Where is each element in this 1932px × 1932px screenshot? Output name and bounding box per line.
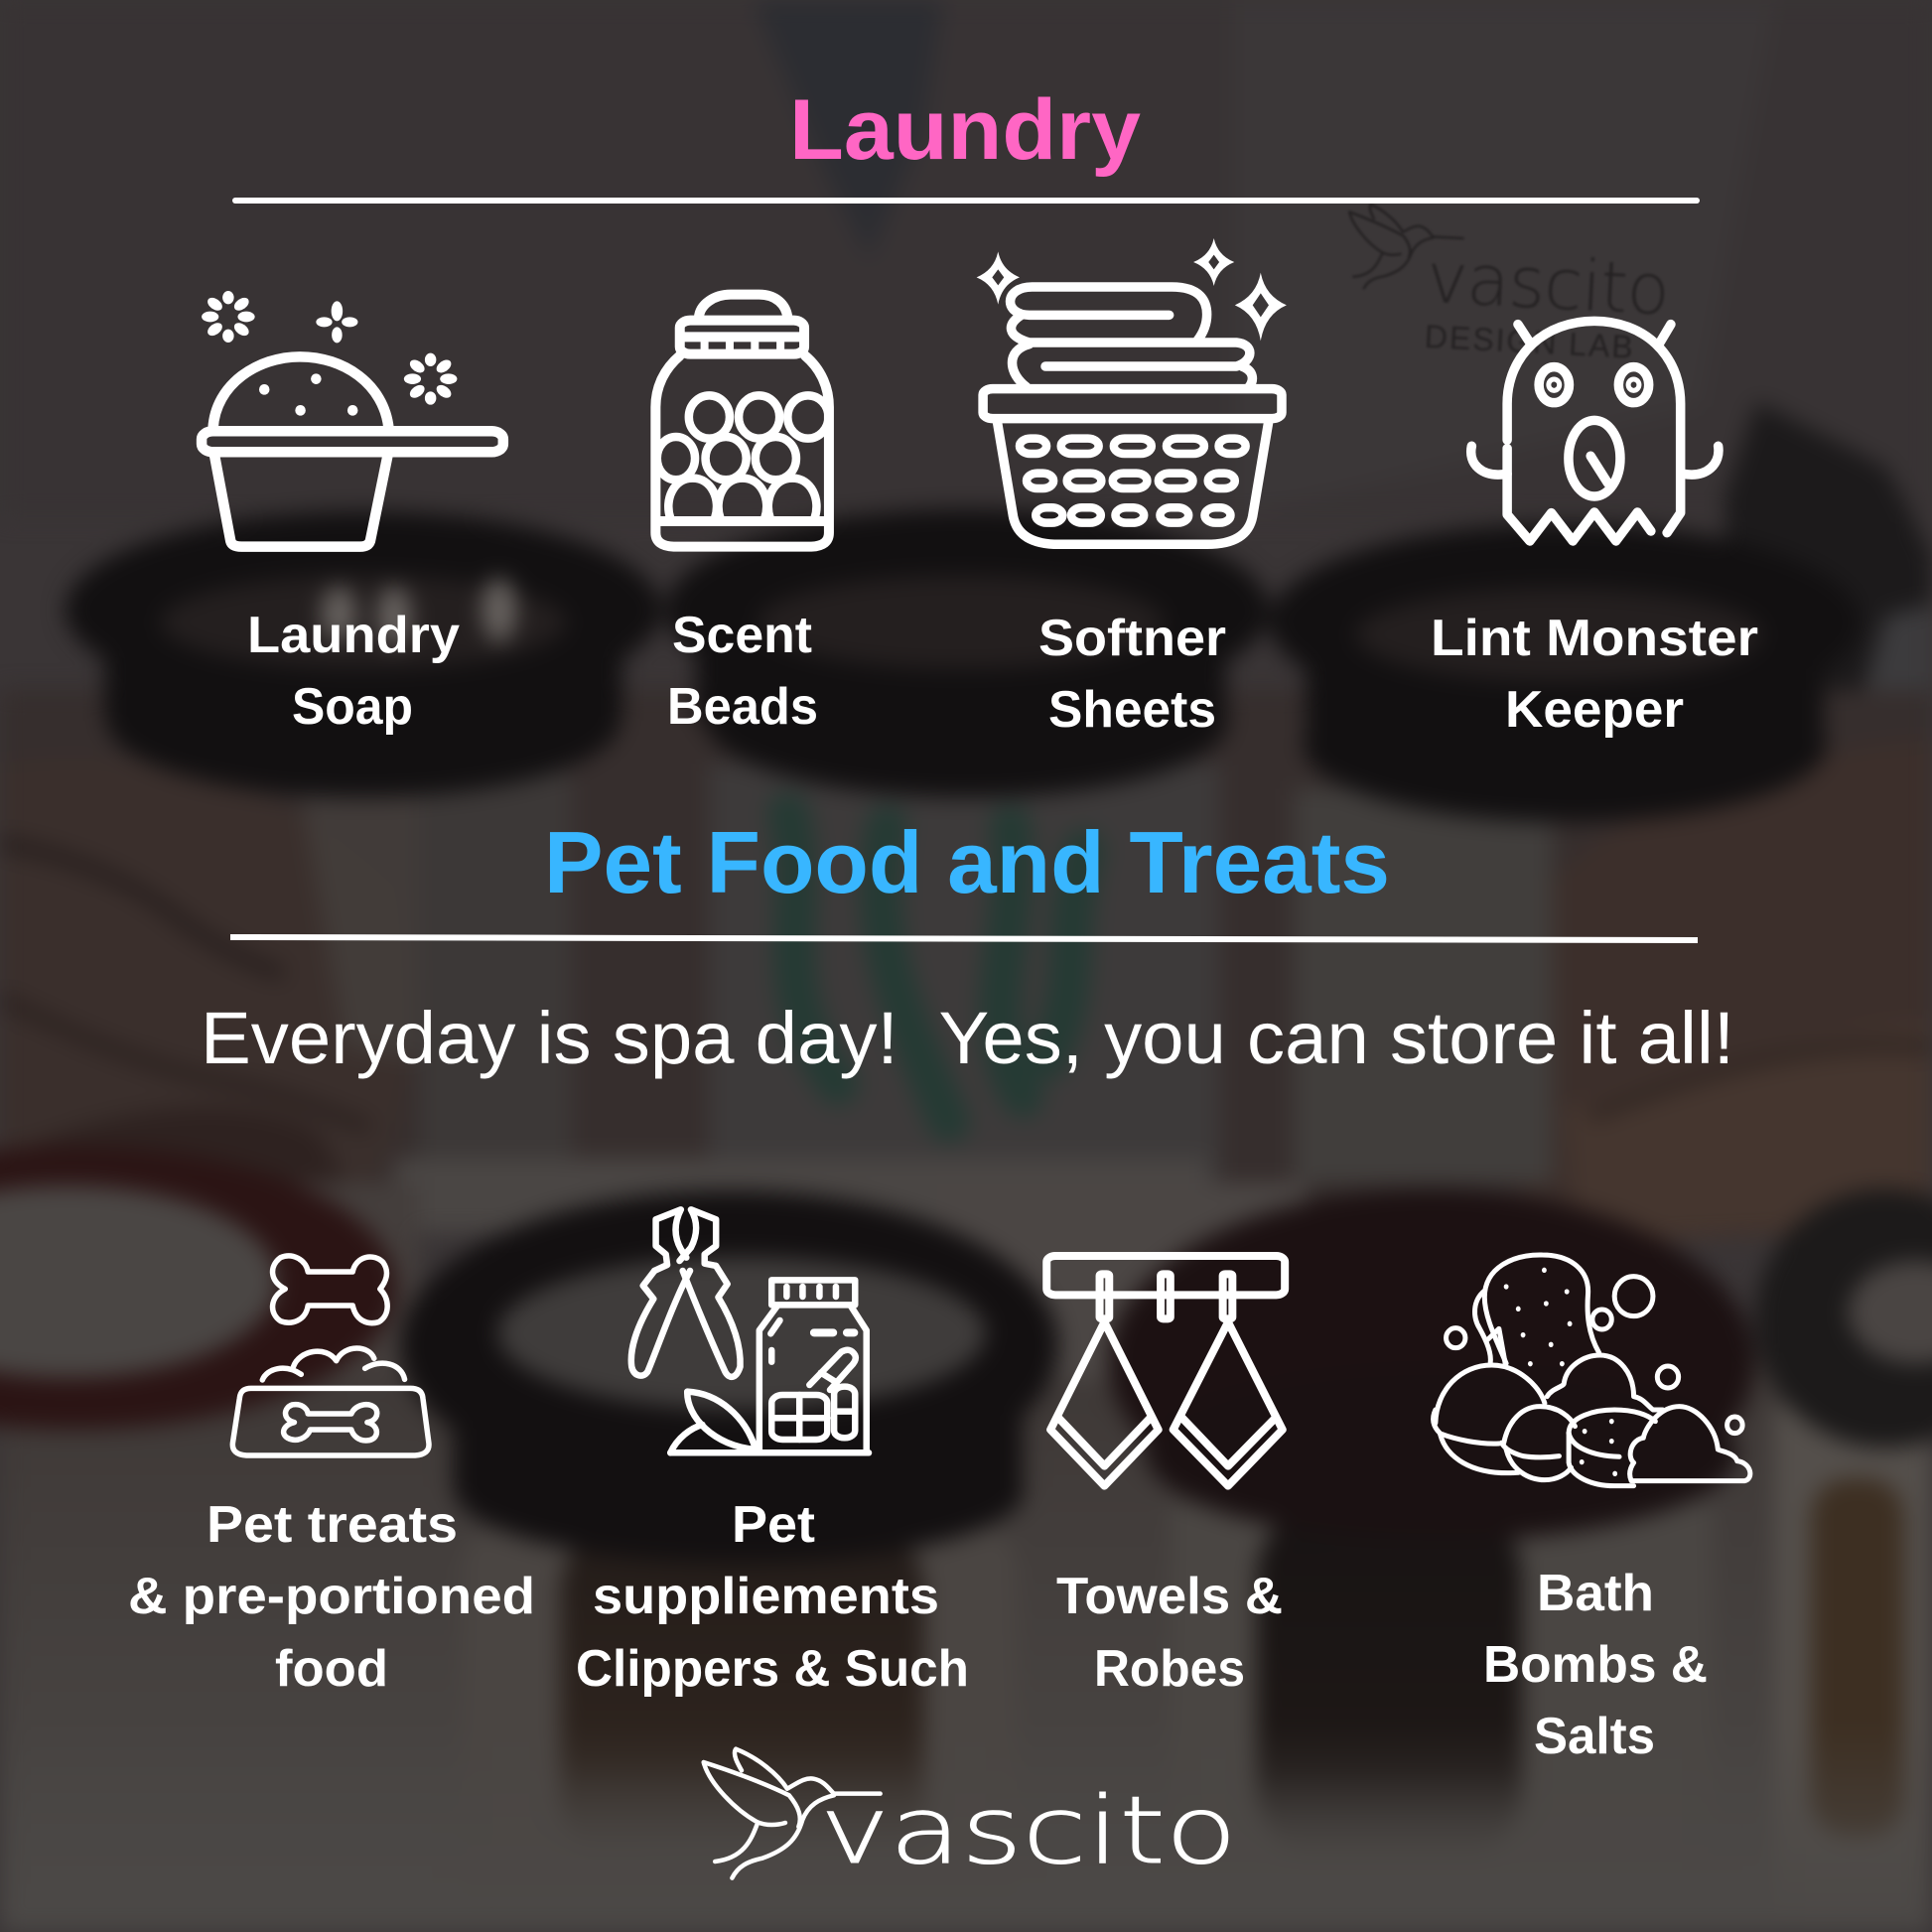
label: Softner Sheets: Sheets: [1048, 681, 1216, 739]
icon: scent beads jar: [655, 295, 829, 547]
tagline: Everyday is spa day! Yes, you can store it all!: [201, 997, 1734, 1079]
label: Towels and Robes: Robes: [1094, 1640, 1245, 1698]
rule under Laundry heading: [232, 198, 1700, 204]
label: Scent Beads: Scent: [672, 607, 812, 664]
icon: bath bombs and salts: [1434, 1255, 1750, 1486]
label: Pet supplements, clippers and such: Clippers & Such: [576, 1640, 969, 1698]
label: Scent Beads: Beads: [667, 678, 818, 736]
label: Bath Bombs and Salts: [1483, 1565, 1708, 1765]
heading: Pet Food and Treats: Pet Food and Treats: [544, 813, 1390, 911]
label: Pet supplements, clippers and such: [576, 1496, 969, 1698]
icon: lint monster: [1471, 321, 1719, 541]
label: Pet supplements, clippers and such: suppliements: [593, 1568, 939, 1625]
label: Pet treats and pre-portioned food: Pet treats: [207, 1496, 458, 1554]
label: Laundry Soap: Laundry: [247, 607, 460, 664]
label: Softner Sheets: Softner: [1038, 610, 1226, 667]
label: Scent Beads: [667, 607, 818, 736]
label: Bath Bombs and Salts: Salts: [1534, 1708, 1655, 1765]
label: Towels and Robes: Towels &: [1056, 1568, 1283, 1625]
label: Lint Monster Keeper: Keeper: [1505, 681, 1684, 739]
label: Softner Sheets: [1038, 610, 1226, 739]
label: Pet supplements, clippers and such: Pet: [732, 1496, 815, 1554]
icon: softener sheets basket: [977, 238, 1287, 544]
label: Pet treats and pre-portioned food: food: [275, 1640, 388, 1698]
icon: pet treats bone and bowl: [232, 1256, 429, 1455]
label: Lint Monster Keeper: Lint Monster: [1431, 610, 1758, 667]
logo: vascito hummingbird: vascito: [820, 1777, 1237, 1885]
icon: pet supplements and clippers: [631, 1209, 869, 1452]
heading: Laundry: Laundry: [789, 82, 1141, 178]
icon: laundry soap scoop: [202, 291, 503, 547]
label: Lint Monster Keeper: [1431, 610, 1758, 739]
shirt logo: [1342, 204, 1673, 367]
label: Laundry Soap: [247, 607, 460, 736]
label: Bath Bombs and Salts: Bombs &: [1483, 1636, 1708, 1694]
shirt logo: DESIGN LAB: [1424, 319, 1639, 365]
label: Bath Bombs and Salts: Bath: [1537, 1565, 1654, 1622]
shirt logo: vascito: [1425, 237, 1672, 332]
label: Pet treats and pre-portioned food: & pre-portioned: [128, 1568, 535, 1625]
rule under Pet Food heading: [230, 934, 1698, 943]
icon: hanging towels: [1046, 1256, 1285, 1486]
label: Laundry Soap: Soap: [292, 678, 413, 736]
label: Towels and Robes: [1056, 1568, 1283, 1698]
logo: vascito hummingbird: [704, 1749, 1237, 1885]
label: Pet treats and pre-portioned food: [128, 1496, 535, 1698]
